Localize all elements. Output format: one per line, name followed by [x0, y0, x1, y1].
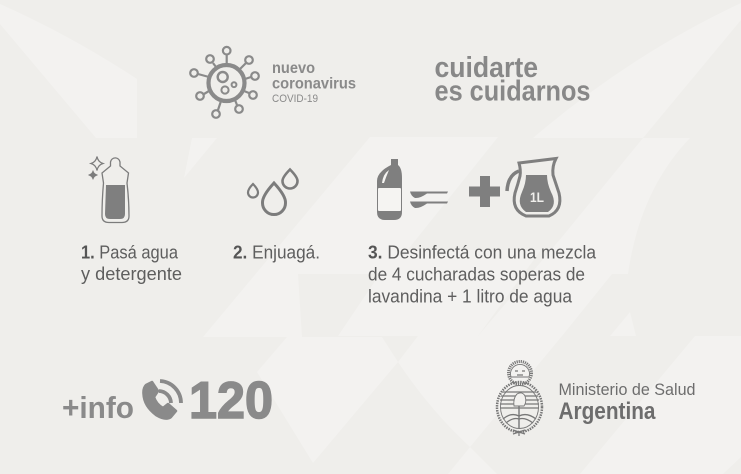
icon: coat of arms: [497, 362, 542, 436]
jug label: 1L: [530, 189, 544, 205]
logo text: Ministerio de Salud: [558, 380, 696, 399]
text: step 3: de 4 cucharadas soperas de: [368, 264, 585, 284]
icon: detergent bottle: [88, 156, 129, 222]
text: step 2: 2. Enjuagá.: [233, 242, 320, 262]
text: step 1: y detergente: [81, 263, 182, 284]
text: step 1: [81, 242, 182, 284]
heading: cuidarte es cuidarnos: [434, 52, 590, 108]
logo text: [272, 60, 356, 105]
logo text: nuevo: [272, 60, 315, 77]
icon: bleach bottle and spoons: [377, 159, 448, 220]
heading: cuidarte es cuidarnos: es cuidarnos: [434, 76, 590, 108]
icon: water jug 1 litre: [507, 158, 560, 216]
text: step 3: lavandina + 1 litro de agua: [368, 286, 573, 306]
logo: Ministerio de Salud: [497, 362, 696, 436]
text: step 3: [368, 242, 597, 306]
logo: Ministerio de Salud: Argentina: [558, 398, 656, 425]
text: step 3: 3. Desinfectá con una mezcla: [368, 242, 597, 262]
text: +info: +info: [62, 390, 134, 425]
text: step 1: 1. Pasá agua: [81, 242, 179, 262]
logo text: COVID-19: [272, 93, 318, 105]
icon: virus: [190, 47, 259, 118]
logo: nuevo coronavirus: [190, 47, 356, 118]
icon: water drops: [248, 170, 298, 214]
icon: plus: [469, 176, 500, 207]
icon: phone: [143, 381, 181, 419]
contact: +info 120: [62, 372, 273, 430]
text: 120: 120: [189, 372, 273, 430]
logo text: coronavirus: [272, 76, 356, 92]
heading: cuidarte es cuidarnos: cuidarte: [434, 52, 538, 84]
